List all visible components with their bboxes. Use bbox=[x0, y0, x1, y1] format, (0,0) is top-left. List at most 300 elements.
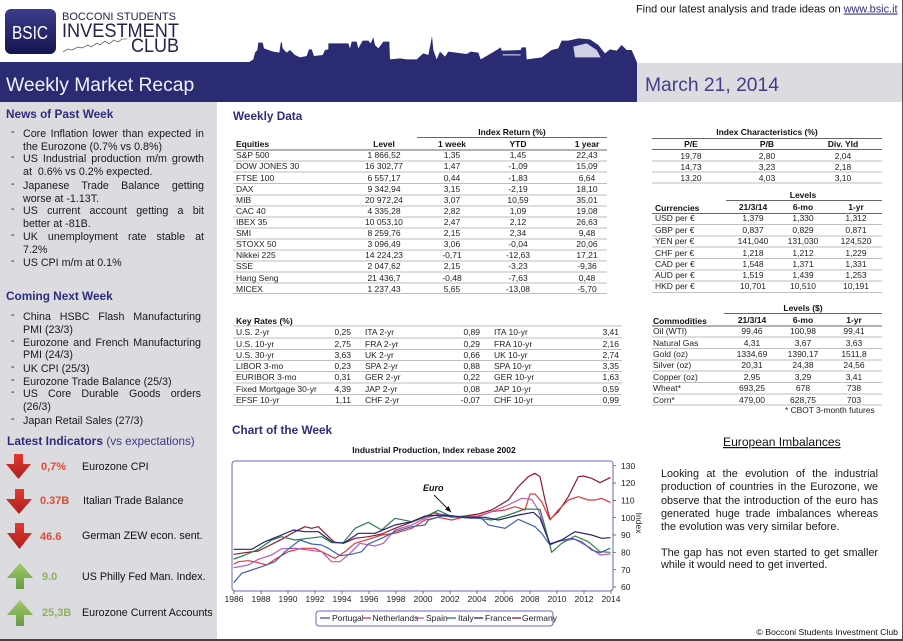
currencies table: CAD per € bbox=[655, 259, 695, 269]
chart: industrial production: 2012 bbox=[575, 594, 594, 604]
equities table: 2,12 bbox=[510, 217, 527, 227]
index characteristics table: P/B bbox=[760, 139, 774, 149]
currencies table: HKD per € bbox=[655, 281, 695, 291]
chart: industrial production: 1988 bbox=[252, 594, 271, 604]
currencies table: 0,829 bbox=[792, 225, 814, 235]
equities table: 1 week bbox=[438, 139, 466, 149]
commodities table: 1511,8 bbox=[841, 349, 867, 359]
equities table: 3 096,49 bbox=[367, 239, 401, 249]
equities table: Index Return (%) bbox=[478, 127, 546, 137]
equities table: DOW JONES 30 bbox=[236, 161, 300, 171]
currencies table: 1,218 bbox=[742, 248, 764, 258]
indicator: Italian Trade Balance: Italian Trade Balance bbox=[83, 495, 183, 507]
events list: PMI (24/3) bbox=[23, 348, 73, 360]
indicator: Eurozone CPI bbox=[6, 454, 149, 479]
equities table: -0,04 bbox=[508, 239, 528, 249]
chart: industrial production: 1996 bbox=[360, 594, 379, 604]
chart: industrial production: 1990 bbox=[279, 594, 298, 604]
commodities table: Copper (oz) bbox=[653, 372, 698, 382]
commodities table: 703 bbox=[847, 395, 861, 405]
chart: industrial production: 70 bbox=[621, 565, 631, 575]
news list bbox=[11, 126, 204, 268]
key rates table: SPA 10-yr bbox=[494, 361, 532, 371]
commodities table: 99,41 bbox=[843, 326, 865, 336]
key rates table bbox=[233, 316, 622, 406]
events list: - bbox=[11, 413, 15, 425]
commodities table: 6-mo bbox=[793, 315, 813, 325]
equities table: 1,09 bbox=[510, 206, 527, 216]
news list: UK unemployment rate stable at bbox=[23, 230, 204, 242]
key rates table: CHF 2-yr bbox=[365, 395, 400, 405]
equities table: MICEX bbox=[236, 284, 263, 294]
chart: industrial production: Netherlands bbox=[372, 613, 418, 623]
equities table: -0,71 bbox=[442, 250, 462, 260]
equities table: 2,34 bbox=[510, 228, 527, 238]
panel: coming next week bbox=[6, 289, 201, 426]
equities table: 1 866,52 bbox=[367, 150, 401, 160]
commodities table: 3,67 bbox=[795, 338, 812, 348]
chart: industrial production: Index bbox=[634, 513, 644, 534]
commodities table: 21/3/14 bbox=[738, 315, 766, 325]
commodities table: 1390,17 bbox=[788, 349, 819, 359]
equities table: -2,19 bbox=[508, 184, 528, 194]
sidebar background bbox=[0, 102, 217, 639]
equities table: Equities bbox=[236, 139, 269, 149]
key rates table: LIBOR 3-mo bbox=[236, 361, 284, 371]
chart: industrial production: Industrial Production, Index rebase 2002 bbox=[352, 445, 516, 455]
equities table: Level bbox=[373, 139, 395, 149]
indicator: Eurozone Current Accounts: Eurozone Current Accounts bbox=[82, 607, 213, 619]
equities table: 20 972,24 bbox=[365, 195, 403, 205]
equities table: 6,64 bbox=[579, 173, 596, 183]
panel: news of past week bbox=[6, 107, 204, 268]
equities table: 3,06 bbox=[444, 239, 461, 249]
currencies table: 1,371 bbox=[792, 259, 814, 269]
text block: european imbalances commentary: production of countries in the Eurozone, we bbox=[661, 480, 878, 492]
index characteristics table: P/E bbox=[684, 139, 698, 149]
key rates table: JAP 2-yr bbox=[365, 384, 398, 394]
key rates table: 0,59 bbox=[602, 384, 619, 394]
indicator: German ZEW: 46.6 bbox=[40, 531, 61, 543]
equities table: 35,01 bbox=[576, 195, 598, 205]
title: Weekly Market Recap bbox=[6, 75, 194, 96]
commodities table: Oil (WTI) bbox=[653, 326, 687, 336]
currencies table: 1,330 bbox=[792, 213, 814, 223]
equities table: -9,36 bbox=[577, 261, 597, 271]
heading: chart of the week: Chart of the Week bbox=[232, 423, 333, 437]
equities table: Nikkei 225 bbox=[236, 250, 276, 260]
news list: - bbox=[11, 126, 15, 138]
commodities table: 693,25 bbox=[739, 383, 765, 393]
equities table: 9 342,94 bbox=[367, 184, 401, 194]
equities table: 0,48 bbox=[579, 273, 596, 283]
news list: better at -81B. bbox=[23, 218, 91, 230]
currencies table bbox=[652, 190, 882, 292]
currencies table: 0,837 bbox=[742, 225, 764, 235]
equities table: -13,08 bbox=[506, 284, 530, 294]
index characteristics table: Div. Yld bbox=[828, 139, 858, 149]
index characteristics table: 14,73 bbox=[680, 162, 702, 172]
commodities table: 3,41 bbox=[846, 372, 863, 382]
text block: european imbalances commentary: The gap has not even started to get smaller bbox=[661, 546, 878, 558]
chart: industrial production: 120 bbox=[621, 478, 635, 488]
key rates table: UK 2-yr bbox=[365, 350, 394, 360]
chart: industrial production: 1994 bbox=[333, 594, 352, 604]
equities table: -1,83 bbox=[508, 173, 528, 183]
news list: worse at -1.13T. bbox=[23, 192, 99, 204]
equities table: MIB bbox=[236, 195, 251, 205]
key rates table: 0,08 bbox=[463, 384, 480, 394]
heading: news of past week: News of Past Week bbox=[6, 107, 113, 121]
equities table: IBEX 35 bbox=[236, 217, 267, 227]
key rates table: 3,41 bbox=[602, 327, 619, 337]
key rates table: EURIBOR 3-mo bbox=[236, 372, 297, 382]
chart: industrial production: 100 bbox=[621, 513, 635, 523]
index characteristics table: 13,20 bbox=[680, 173, 702, 183]
currencies table: 1,312 bbox=[845, 213, 867, 223]
equities table: -5,70 bbox=[577, 284, 597, 294]
commodities table: Levels ($) bbox=[783, 303, 823, 313]
commodities table bbox=[652, 303, 882, 415]
heading: european imbalances: European Imbalances bbox=[723, 435, 841, 449]
currencies table: 1,519 bbox=[742, 270, 764, 280]
equities table: 1,45 bbox=[510, 150, 527, 160]
date panel bbox=[637, 63, 903, 102]
chart: industrial production: 2010 bbox=[548, 594, 567, 604]
text block: european imbalances commentary: while it would need to get inverted. bbox=[661, 558, 827, 570]
chart: industrial production: Germany bbox=[522, 613, 558, 623]
heading: coming next week: Coming Next Week bbox=[6, 289, 113, 303]
index characteristics table: Index Characteristics (%) bbox=[716, 127, 818, 137]
key rates table: FRA 2-yr bbox=[365, 339, 399, 349]
website note: Find our latest analysis and trade ideas on www.bsic.it bbox=[636, 4, 898, 16]
events list bbox=[11, 309, 201, 426]
equities table: SMI bbox=[236, 228, 251, 238]
indicator: US Philly Fed bbox=[7, 563, 206, 589]
key rates table: CHF 10-yr bbox=[494, 395, 533, 405]
copyright: © Bocconi Students Investment Club bbox=[756, 627, 898, 637]
chart: industrial production: 2006 bbox=[495, 594, 514, 604]
equities table: SSE bbox=[236, 261, 253, 271]
news list: - bbox=[11, 255, 15, 267]
commodities table: Corn* bbox=[653, 395, 675, 405]
key rates table: 1,63 bbox=[602, 372, 619, 382]
text block: european imbalances commentary: the evolution was very similar before. bbox=[661, 520, 839, 532]
commodities table: 100,98 bbox=[790, 326, 816, 336]
key rates table: 0,22 bbox=[463, 372, 480, 382]
commodities table: 678 bbox=[796, 383, 810, 393]
skyline bbox=[240, 36, 637, 70]
news list: Japanese Trade Balance getting bbox=[23, 180, 204, 192]
equities table: 26,63 bbox=[576, 217, 598, 227]
equities table: 10,59 bbox=[507, 195, 529, 205]
equities table: 3,07 bbox=[444, 195, 461, 205]
events list: - bbox=[11, 374, 15, 386]
currencies table: 1-yr bbox=[848, 202, 864, 212]
equities table: 2,15 bbox=[444, 261, 461, 271]
commodities table: 1-yr bbox=[846, 315, 862, 325]
commodities table: * CBOT 3-month futures bbox=[785, 405, 875, 415]
key rates table: 2,75 bbox=[334, 339, 351, 349]
equities table: 10 053,10 bbox=[365, 217, 403, 227]
key rates table: -0,07 bbox=[461, 395, 480, 405]
events list: China HSBC Flash Manufacturing bbox=[23, 310, 201, 322]
commodities table: Wheat* bbox=[653, 383, 682, 393]
banner bbox=[0, 62, 637, 102]
chart: industrial production: 2002 bbox=[441, 594, 460, 604]
key rates table: JAP 10-yr bbox=[494, 384, 531, 394]
chart: industrial production: 110 bbox=[621, 496, 635, 506]
equities table: 9,48 bbox=[579, 228, 596, 238]
chart: industrial production: Euro bbox=[423, 483, 444, 493]
key rates table: 3,35 bbox=[602, 361, 619, 371]
chart: industrial production: 2000 bbox=[414, 594, 433, 604]
key rates table: UK 10-yr bbox=[494, 350, 528, 360]
equities table bbox=[233, 127, 607, 294]
chart: industrial production: 130 bbox=[621, 461, 635, 471]
key rates table: 0,31 bbox=[334, 372, 351, 382]
commodities table: Gold (oz) bbox=[653, 349, 688, 359]
commodities table: 24,56 bbox=[843, 360, 865, 370]
equities table: 2,82 bbox=[444, 206, 461, 216]
equities table: Hang Seng bbox=[236, 273, 279, 283]
currencies table: 1,331 bbox=[845, 259, 867, 269]
index characteristics table: 4,03 bbox=[759, 173, 776, 183]
events list: - bbox=[11, 361, 15, 373]
key rates table: GER 2-yr bbox=[365, 372, 401, 382]
news list: US CPI m/m at 0.1% bbox=[23, 256, 122, 268]
commodities table: 24,38 bbox=[792, 360, 814, 370]
key rates table: Key Rates (%) bbox=[236, 316, 293, 326]
currencies table: 10,191 bbox=[843, 281, 869, 291]
equities table: 3,15 bbox=[444, 184, 461, 194]
equities table: 1 237,43 bbox=[367, 284, 401, 294]
index characteristics table: 2,80 bbox=[759, 151, 776, 161]
key rates table: ITA 2-yr bbox=[365, 327, 394, 337]
currencies table: 124,520 bbox=[841, 236, 872, 246]
key rates table: FRA 10-yr bbox=[494, 339, 532, 349]
currencies table: 1,229 bbox=[845, 248, 867, 258]
currencies table: 1,439 bbox=[792, 270, 814, 280]
currencies table: 1,212 bbox=[792, 248, 814, 258]
key rates table: ITA 10-yr bbox=[494, 327, 528, 337]
equities table: -1,09 bbox=[508, 161, 528, 171]
currencies table: YEN per € bbox=[655, 236, 694, 246]
index characteristics table: 2,18 bbox=[835, 162, 852, 172]
equities table: 22,43 bbox=[576, 150, 598, 160]
key rates table: 4,39 bbox=[334, 384, 351, 394]
key rates table: 0,29 bbox=[463, 339, 480, 349]
logo bbox=[5, 9, 179, 57]
equities table: 1,47 bbox=[444, 161, 461, 171]
commodities table: 1334,69 bbox=[737, 349, 768, 359]
key rates table: 2,74 bbox=[602, 350, 619, 360]
equities table: 20,06 bbox=[576, 239, 598, 249]
equities table: DAX bbox=[236, 184, 254, 194]
chart: industrial production: Spain bbox=[426, 613, 448, 623]
indicator: Eurozone Current Accounts bbox=[7, 600, 213, 626]
key rates table: 0,89 bbox=[463, 327, 480, 337]
chart: industrial production: 90 bbox=[621, 530, 631, 540]
currencies table: 1,548 bbox=[742, 259, 764, 269]
equities table: 17,21 bbox=[576, 250, 598, 260]
commodities table: 2,95 bbox=[744, 372, 761, 382]
commodities table: 628,75 bbox=[790, 395, 816, 405]
equities table: 2 047,62 bbox=[367, 261, 401, 271]
indicator: Eurozone CPI: 0,7% bbox=[41, 461, 66, 473]
date panel: March 21, 2014 bbox=[645, 75, 779, 96]
index characteristics table: 19,78 bbox=[680, 151, 702, 161]
text block: european imbalances commentary: generated huge trade imbalances whereas bbox=[661, 508, 878, 520]
key rates table: 0,25 bbox=[334, 327, 351, 337]
equities table: 21 436,7 bbox=[367, 273, 401, 283]
currencies table: GBP per € bbox=[655, 225, 695, 235]
equities table: 6 557,17 bbox=[367, 173, 401, 183]
currencies table: 131,030 bbox=[788, 236, 819, 246]
commodities table: 3,29 bbox=[795, 372, 812, 382]
equities table: 14 224,23 bbox=[365, 250, 403, 260]
commodities table: 20,31 bbox=[741, 360, 763, 370]
commodities table: 738 bbox=[847, 383, 861, 393]
commodities table: Silver (oz) bbox=[653, 360, 691, 370]
events list: US Core Durable Goods orders bbox=[23, 388, 201, 400]
equities table: 15,09 bbox=[576, 161, 598, 171]
chart: industrial production: 60 bbox=[621, 582, 631, 592]
key rates table: 1,11 bbox=[335, 395, 351, 405]
key rates table: GER 10-yr bbox=[494, 372, 534, 382]
indicator: Italian Trade Balance: 0.37B bbox=[40, 495, 69, 507]
equities table: FTSE 100 bbox=[236, 173, 275, 183]
currencies table: 10,701 bbox=[740, 281, 766, 291]
news list: at 0.6% vs 0.2% expected. bbox=[23, 166, 153, 178]
currencies table: 1,253 bbox=[845, 270, 867, 280]
chart: industrial production: 1992 bbox=[306, 594, 325, 604]
currencies table: 1,379 bbox=[742, 213, 764, 223]
equities table: -0,48 bbox=[442, 273, 462, 283]
news list: Core Inflation lower than expected in bbox=[23, 128, 204, 140]
events list: PMI (23/3) bbox=[23, 324, 73, 336]
equities table: S&P 500 bbox=[236, 150, 270, 160]
events list: Eurozone Trade Balance (25/3) bbox=[23, 376, 172, 388]
currencies table: 6-mo bbox=[793, 202, 813, 212]
heading: weekly data: Weekly Data bbox=[233, 109, 303, 123]
key rates table: 0,66 bbox=[463, 350, 480, 360]
news list: - bbox=[11, 178, 15, 190]
chart: industrial production: 2008 bbox=[521, 594, 540, 604]
key rates table: U.S. 30-yr bbox=[236, 350, 274, 360]
currencies table: 141,040 bbox=[738, 236, 769, 246]
chart: industrial production: 2014 bbox=[602, 594, 621, 604]
equities table: 5,65 bbox=[444, 284, 461, 294]
news list: - bbox=[11, 151, 15, 163]
key rates table: 0,99 bbox=[602, 395, 619, 405]
key rates table: U.S. 2-yr bbox=[236, 327, 270, 337]
news list: US Industrial production m/m growth bbox=[23, 152, 204, 164]
key rates table: U.S. 10-yr bbox=[236, 339, 274, 349]
commodities table: 3,63 bbox=[846, 338, 863, 348]
chart: industrial production: 2004 bbox=[468, 594, 487, 604]
equities table: CAC 40 bbox=[236, 206, 266, 216]
currencies table: USD per € bbox=[655, 213, 695, 223]
index characteristics table: 3,10 bbox=[835, 173, 852, 183]
news list: 7.2% bbox=[23, 244, 47, 256]
key rates table: 3,63 bbox=[334, 350, 351, 360]
equities table: 0,44 bbox=[444, 173, 461, 183]
commodities table: Natural Gas bbox=[653, 338, 698, 348]
chart: industrial production: Portugal bbox=[332, 613, 364, 623]
currencies table: CHF per € bbox=[655, 248, 694, 258]
equities table: 2,47 bbox=[444, 217, 461, 227]
equities table: 2,15 bbox=[444, 228, 461, 238]
equities table: -7,63 bbox=[508, 273, 528, 283]
news list: the Eurozone (0.7% vs 0.8%) bbox=[23, 140, 162, 152]
text block: european imbalances commentary bbox=[661, 468, 878, 570]
chart: industrial production: 80 bbox=[621, 548, 631, 558]
equities table: YTD bbox=[510, 139, 526, 149]
events list: - bbox=[11, 386, 15, 398]
currencies table: AUD per € bbox=[655, 270, 695, 280]
indicator: Italian Trade Balance bbox=[6, 489, 183, 514]
events list: - bbox=[11, 309, 15, 321]
equities table: -3,23 bbox=[508, 261, 528, 271]
logo: BSIC bbox=[12, 23, 48, 43]
currencies table: 10,510 bbox=[790, 281, 816, 291]
equities table: 1 year bbox=[575, 139, 600, 149]
indicator: US Philly Fed: 9.0 bbox=[42, 571, 57, 583]
equities table: 18,10 bbox=[576, 184, 598, 194]
key rates table: Fixed Mortgage 30-yr bbox=[236, 384, 317, 394]
logo: INVESTMENT bbox=[62, 20, 179, 42]
equities table: 1,35 bbox=[444, 150, 461, 160]
events list: Japan Retail Sales (27/3) bbox=[23, 414, 143, 426]
commodities table: 479,00 bbox=[739, 395, 765, 405]
logo: BOCCONI STUDENTS bbox=[62, 11, 176, 23]
logo: CLUB bbox=[131, 35, 179, 57]
indicator: Eurozone Current Accounts: 25,3B bbox=[42, 607, 71, 619]
index characteristics table: 3,23 bbox=[759, 162, 776, 172]
indicator: German ZEW: German ZEW econ. sent. bbox=[82, 530, 203, 542]
commodities table: Commodities bbox=[653, 316, 707, 326]
indicator: US Philly Fed: US Philly Fed Man. Index. bbox=[82, 571, 206, 583]
currencies table: 0,871 bbox=[845, 225, 867, 235]
currencies table: Levels bbox=[790, 190, 817, 200]
index characteristics table: 2,04 bbox=[835, 151, 852, 161]
text block: european imbalances commentary: observe that the introduction of the euro has bbox=[661, 494, 878, 506]
news list: - bbox=[11, 229, 15, 241]
index characteristics table bbox=[652, 127, 882, 183]
key rates table: EFSF 10-yr bbox=[236, 395, 280, 405]
events list: - bbox=[11, 335, 15, 347]
chart: industrial production: France bbox=[485, 613, 512, 623]
news list: US current account getting a bit bbox=[23, 204, 204, 216]
currencies table: Currencies bbox=[655, 203, 700, 213]
chart: industrial production bbox=[225, 445, 644, 626]
key rates table: 0,23 bbox=[334, 361, 351, 371]
equities table: 8 259,76 bbox=[367, 228, 401, 238]
key rates table: SPA 2-yr bbox=[365, 361, 398, 371]
events list: (26/3) bbox=[23, 400, 51, 412]
equities table: STOXX 50 bbox=[236, 239, 277, 249]
commodities table: 99,46 bbox=[741, 326, 763, 336]
events list: Eurozone and French Manufacturing bbox=[23, 336, 201, 348]
latest indicators heading: Latest Indicators (vs expectations) bbox=[7, 434, 195, 448]
chart: industrial production: Italy bbox=[458, 613, 474, 623]
commodities table: 4,31 bbox=[744, 338, 761, 348]
text block: european imbalances commentary: Looking at the evolution of the industrial bbox=[661, 468, 878, 480]
chart: industrial production: 1986 bbox=[225, 594, 244, 604]
equities table: -12,63 bbox=[506, 250, 530, 260]
chart: industrial production: 1998 bbox=[387, 594, 406, 604]
